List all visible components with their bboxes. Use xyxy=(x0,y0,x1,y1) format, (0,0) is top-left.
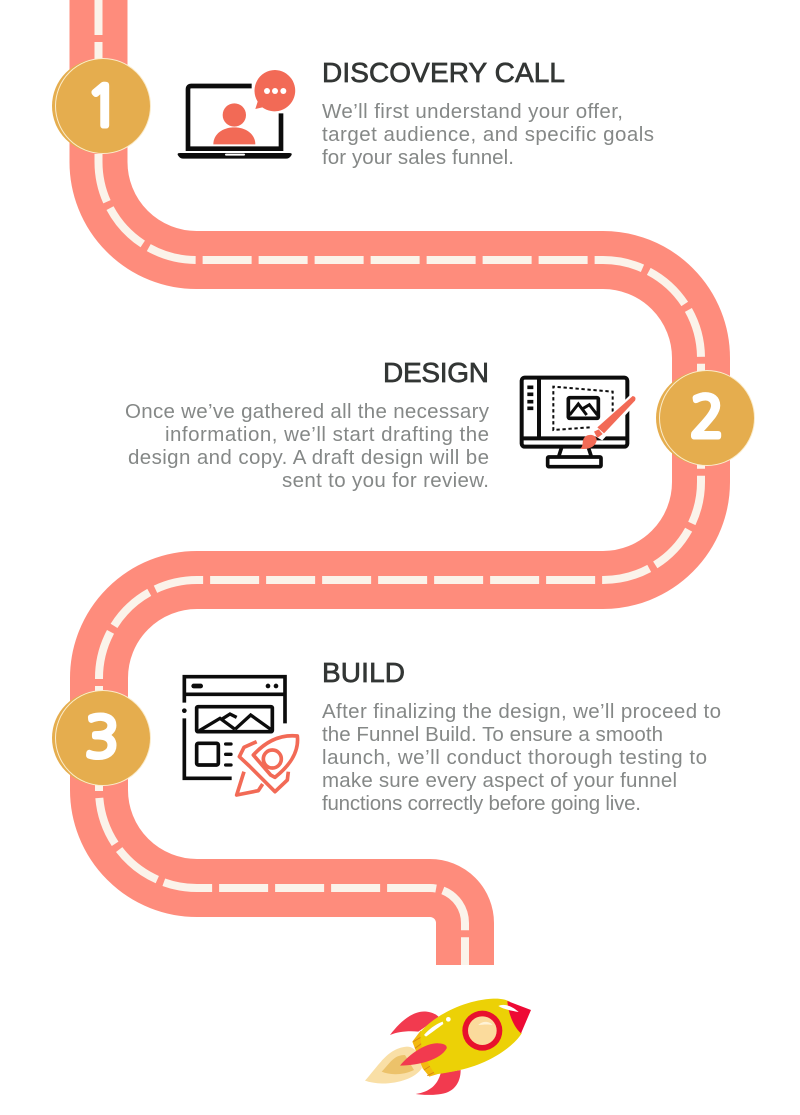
body: build: After finalizing the design, we’ll proceed to xyxy=(322,700,721,723)
body: build: make sure every aspect of your funnel xyxy=(322,769,677,792)
icon: monitor with paint brush xyxy=(522,378,638,467)
body: build xyxy=(322,700,721,815)
step 2 badge xyxy=(656,370,754,466)
step 3 text xyxy=(322,657,721,815)
body: design: sent to you for review. xyxy=(282,469,489,492)
heading: build: BUILD xyxy=(322,657,405,688)
body: design: Once we’ve gathered all the necessary xyxy=(125,400,490,423)
body: discovery call: target audience, and specific goals xyxy=(322,123,654,146)
heading: design: DESIGN xyxy=(383,357,489,388)
step 1 text xyxy=(322,57,654,169)
body: build: functions correctly before going live. xyxy=(322,792,641,815)
body: build: the Funnel Build. To ensure a smooth xyxy=(322,723,663,746)
body: design: information, we’ll start drafting the xyxy=(165,423,489,446)
step 3 badge xyxy=(52,690,150,786)
body: design: design and copy. A draft design will be xyxy=(128,446,489,469)
body: discovery call xyxy=(322,100,654,169)
icon: yellow rocket xyxy=(365,999,531,1095)
step 2 text xyxy=(125,357,490,492)
body: discovery call: We’ll first understand your offer, xyxy=(322,100,623,123)
body: discovery call: for your sales funnel. xyxy=(322,146,514,169)
step 1 badge xyxy=(52,58,150,154)
icon: laptop video call xyxy=(178,70,295,159)
step 3 badge: 3 xyxy=(85,710,119,766)
step 1 badge: 1 xyxy=(86,79,120,135)
body: design xyxy=(125,400,490,492)
winding road xyxy=(98,0,701,965)
step 2 badge: 2 xyxy=(690,390,724,446)
heading: discovery call: DISCOVERY CALL xyxy=(322,57,565,88)
body: build: launch, we’ll conduct thorough testing to xyxy=(322,746,707,769)
icon: web page with rocket xyxy=(182,677,298,795)
